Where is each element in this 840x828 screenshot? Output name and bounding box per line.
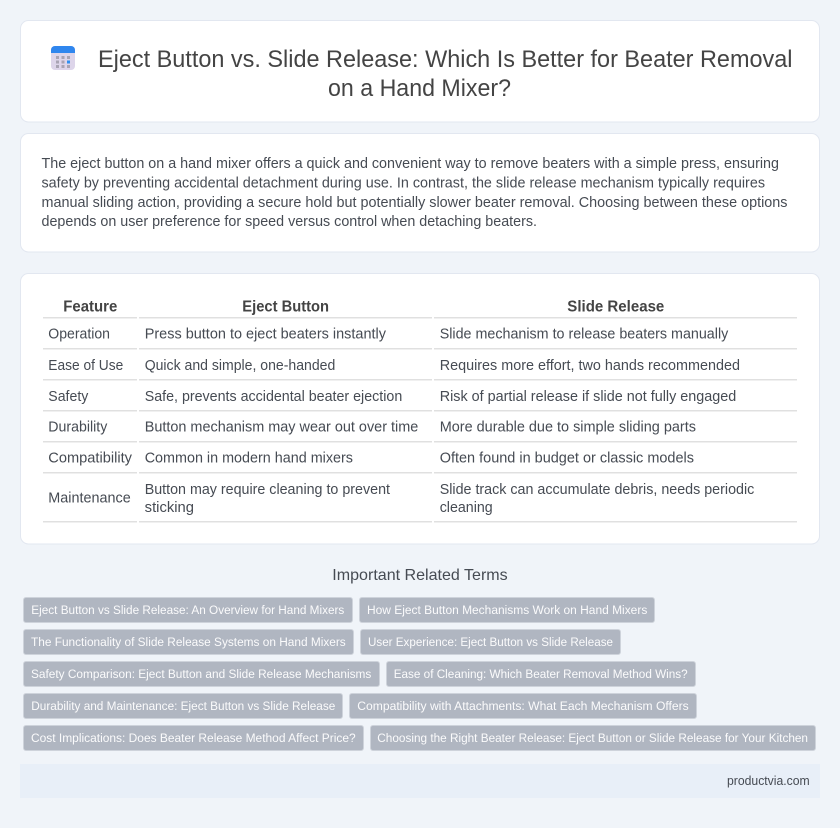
row: operation: Operation [48,327,110,343]
tag: How Eject Button Mechanisms Work on Hand Mixers [367,603,647,617]
row: safety: Safe, prevents accidental beater ejection [145,389,402,405]
row: ease of use: Ease of Use [48,358,123,374]
header panel [20,20,820,122]
row: safety [43,389,797,412]
tag [24,598,352,622]
tag [370,726,816,750]
table header row: Feature [63,299,117,316]
title [98,46,792,102]
intro text block: The eject button on a hand mixer offers a quick and convenient way to remove beaters with a simple press, ensuring [42,156,779,172]
row: maintenance: Slide track can accumulate debris, needs periodic [440,482,754,498]
tag [360,598,654,622]
tag: Cost Implications: Does Beater Release Method Affect Price? [31,731,356,745]
row: compatibility: Common in modern hand mixers [145,451,353,467]
row: compatibility: Often found in budget or classic models [440,451,694,467]
table header row: Eject Button [242,299,329,316]
tag: Eject Button vs Slide Release: An Overview for Hand Mixers [31,603,344,617]
intro text block: safety by preventing accidental detachment during use. In contrast, the slide release mechanism typically requires [42,176,765,192]
icon: calendar grid [51,46,75,70]
row: ease of use: Quick and simple, one-handed [145,358,335,374]
row: durability [43,420,797,442]
row: maintenance: cleaning [440,500,493,516]
row: durability: Durability [48,420,108,436]
tag: User Experience: Eject Button vs Slide Release [368,635,613,649]
footer source credit: productvia.com [727,774,810,788]
tag: Safety Comparison: Eject Button and Slide Release Mechanisms [31,667,371,681]
row: compatibility: Compatibility [48,451,133,467]
row: operation: Slide mechanism to release beaters manually [440,327,729,343]
tag [360,630,620,654]
tag [386,662,696,686]
row: ease of use [43,358,797,380]
title: on a Hand Mixer? [328,75,511,102]
intro text block: depends on user preference for speed versus control when detaching beaters. [42,214,537,230]
row: maintenance: sticking [145,500,194,516]
intro text block: manual sliding action, providing a secure hold but potentially slower beater removal. Choosing between these options [42,195,788,211]
tag: Ease of Cleaning: Which Beater Removal Method Wins? [394,667,688,681]
row: ease of use: Requires more effort, two hands recommended [440,358,740,374]
tag [24,630,354,654]
row: durability: More durable due to simple sliding parts [440,420,696,436]
row: maintenance: Maintenance [48,491,131,507]
heading: important related terms: Important Related Terms [332,567,508,584]
row: safety: Safety [48,389,89,405]
tag [24,662,380,686]
tag: Choosing the Right Beater Release: Eject Button or Slide Release for Your Kitchen [377,731,808,745]
tag: The Functionality of Slide Release Systems on Hand Mixers [31,635,346,649]
panel: comparison table [20,274,820,544]
panel: intro paragraph [20,134,820,252]
tag: Durability and Maintenance: Eject Button vs Slide Release [31,699,335,713]
row: operation: Press button to eject beaters instantly [145,327,387,343]
row: compatibility [43,451,797,474]
table header row: Slide Release [567,299,664,316]
row: safety: Risk of partial release if slide not fully engaged [440,389,736,405]
row: durability: Button mechanism may wear out over time [145,420,418,436]
table header row [43,299,797,318]
related term tags [24,598,816,750]
row: maintenance: Button may require cleaning to prevent [145,482,390,498]
tag [24,694,342,718]
tag: Compatibility with Attachments: What Each Mechanism Offers [357,699,689,713]
row: maintenance [43,482,797,522]
tag [350,694,696,718]
tag [24,726,364,750]
intro text block [42,156,788,230]
row: operation [43,327,797,350]
title: Eject Button vs. Slide Release: Which Is Better for Beater Removal [98,46,792,73]
footer bar [20,764,820,798]
